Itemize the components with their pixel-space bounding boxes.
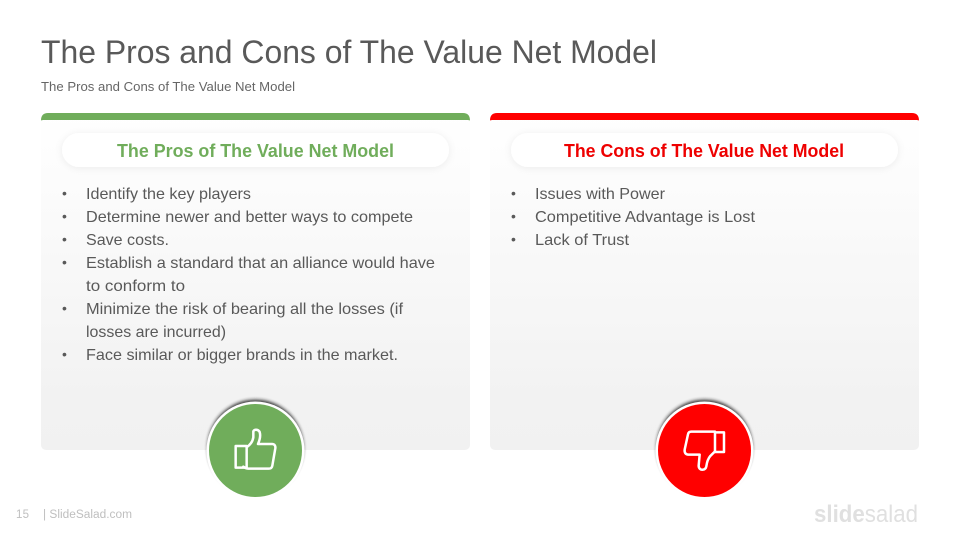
- panel: pros: [41, 113, 470, 450]
- pros list: [62, 185, 435, 364]
- pros list: •: [62, 254, 67, 270]
- pros list: •: [62, 300, 67, 316]
- cons list: •: [511, 185, 516, 201]
- logo: slidesalad: slidesalad: [814, 501, 918, 528]
- footer source: | SlideSalad.com: [43, 509, 132, 521]
- footer page number: 15: [16, 509, 29, 521]
- icon: thumbs down: [656, 400, 754, 500]
- cons list: [511, 185, 756, 249]
- cons heading pill: [511, 133, 898, 167]
- pros list: to conform to: [86, 278, 185, 295]
- pros list: •: [62, 185, 67, 201]
- pros list: Save costs.: [86, 232, 169, 249]
- pros list: •: [62, 346, 67, 362]
- cons list: Competitive Advantage is Lost: [535, 209, 756, 226]
- pros list: Identify the key players: [86, 186, 251, 203]
- panel: cons: [490, 113, 919, 450]
- pros heading: The Pros of The Value Net Model: [117, 140, 394, 161]
- cons list: •: [511, 208, 516, 224]
- icon: thumbs up: [206, 400, 304, 500]
- pros list: Establish a standard that an alliance would have: [86, 255, 435, 272]
- pros list: •: [62, 231, 67, 247]
- pros list: •: [62, 208, 67, 224]
- cons list: •: [511, 231, 516, 247]
- pros list: losses are incurred): [86, 324, 226, 341]
- subtitle: The Pros and Cons of The Value Net Model: [41, 80, 295, 94]
- cons top bar: [490, 113, 919, 120]
- pros list: Determine newer and better ways to compete: [86, 209, 413, 226]
- pros top bar: [41, 113, 470, 120]
- cons heading: The Cons of The Value Net Model: [564, 140, 844, 161]
- pros list: Minimize the risk of bearing all the losses (if: [86, 301, 404, 318]
- cons list: Lack of Trust: [535, 232, 630, 249]
- title: The Pros and Cons of The Value Net Model: [41, 34, 657, 70]
- cons list: Issues with Power: [535, 186, 666, 203]
- pros heading pill: [62, 133, 449, 167]
- pros card background: [41, 113, 470, 450]
- pros list: Face similar or bigger brands in the market.: [86, 347, 398, 364]
- cons card background: [490, 113, 919, 450]
